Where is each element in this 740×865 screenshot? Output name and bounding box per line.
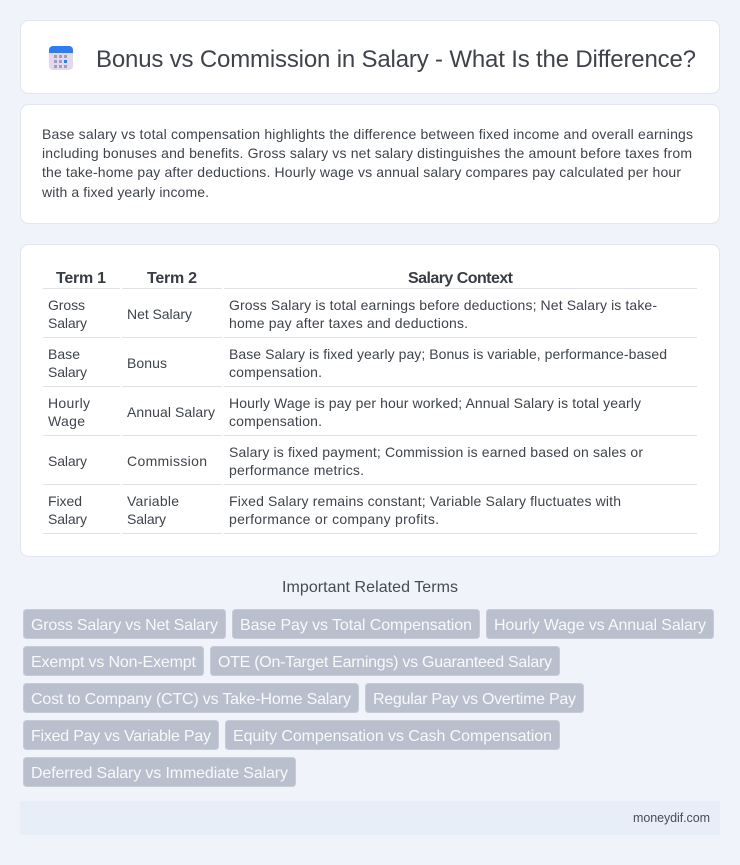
tag: Gross Salary vs Net Salary	[31, 617, 218, 634]
heading: related terms: Important Related Terms	[282, 579, 458, 596]
tag: Base Pay vs Total Compensation	[240, 617, 472, 634]
tag	[226, 720, 560, 750]
table row: base vs bonus: Bonus	[127, 355, 167, 371]
footer	[20, 801, 720, 835]
table row: fixed vs variable: Salary	[127, 511, 166, 527]
title: Bonus vs Commission in Salary - What Is the Difference?	[96, 46, 696, 73]
table row: base vs bonus: compensation.	[229, 364, 322, 380]
text block: summary paragraph: including bonuses and benefits. Gross salary vs net salary distinguishes the amount before taxes from	[42, 145, 692, 161]
panel: header	[20, 20, 720, 94]
tag: Regular Pay vs Overtime Pay	[373, 691, 576, 708]
icon: calendar	[49, 46, 73, 70]
table row: gross vs net: home pay after taxes and deductions.	[229, 315, 468, 331]
table row: hourly vs annual: Annual Salary	[127, 404, 215, 420]
tag	[486, 610, 714, 638]
tag: Hourly Wage vs Annual Salary	[494, 617, 706, 634]
tag	[24, 684, 358, 712]
tag	[232, 610, 480, 638]
tag: Cost to Company (CTC) vs Take-Home Salary	[31, 691, 351, 708]
text block: summary paragraph: with a fixed yearly income.	[41, 184, 209, 200]
table row: fixed vs variable: Fixed	[48, 493, 82, 509]
table row: gross vs net	[48, 297, 657, 331]
table row: hourly vs annual	[48, 395, 641, 429]
panel: comparison table	[20, 244, 720, 556]
table row: fixed vs variable: performance or company profits.	[229, 511, 439, 527]
table row: gross vs net: Gross	[48, 297, 85, 313]
tag: Deferred Salary vs Immediate Salary	[31, 765, 288, 782]
table row: salary vs commission: Salary is fixed payment; Commission is earned based on sales or	[229, 444, 643, 460]
tag: Exempt vs Non-Exempt	[31, 654, 197, 671]
table row: base vs bonus	[48, 346, 667, 380]
table row: hourly vs annual: Hourly	[48, 395, 90, 411]
tag list: related terms	[24, 610, 714, 786]
table row: salary vs commission	[48, 444, 643, 478]
tag	[24, 610, 226, 638]
table header: Term 1	[56, 270, 106, 287]
footer: moneydif.com	[633, 811, 710, 825]
table row: gross vs net: Gross Salary is total earnings before deductions; Net Salary is take-	[229, 297, 657, 313]
tag	[366, 684, 584, 712]
tag	[24, 646, 204, 676]
tag	[24, 758, 296, 786]
text block: summary paragraph: the take-home pay after deductions. Hourly wage vs annual salary compares pay calculated per hour	[42, 164, 681, 180]
panel: summary	[20, 104, 720, 224]
tag	[210, 646, 560, 676]
table row: hourly vs annual: Hourly Wage is pay per hour worked; Annual Salary is total yearly	[229, 395, 641, 411]
tag: OTE (On-Target Earnings) vs Guaranteed Salary	[218, 654, 552, 671]
text block: summary paragraph: Base salary vs total compensation highlights the difference between fixed income and overall earnings	[42, 126, 693, 142]
table row: base vs bonus: Base Salary is fixed yearly pay; Bonus is variable, performance-based	[229, 346, 667, 362]
table row: fixed vs variable: Fixed Salary remains constant; Variable Salary fluctuates with	[229, 493, 621, 509]
table row: fixed vs variable: Variable	[127, 493, 179, 509]
table row: base vs bonus: Base	[48, 346, 80, 362]
text block: summary paragraph	[41, 126, 693, 200]
table row: base vs bonus: Salary	[48, 364, 87, 380]
table row: fixed vs variable: Salary	[48, 511, 87, 527]
table row: salary vs commission: Salary	[48, 453, 87, 469]
tag: Fixed Pay vs Variable Pay	[31, 728, 211, 745]
tag	[24, 720, 218, 750]
table row: hourly vs annual: compensation.	[229, 413, 322, 429]
table row: gross vs net: Salary	[48, 315, 87, 331]
table row: salary vs commission: Commission	[127, 453, 207, 469]
table header: Term 2	[147, 270, 197, 287]
tag: Equity Compensation vs Cash Compensation	[233, 728, 552, 745]
table row: salary vs commission: performance metrics.	[229, 462, 364, 478]
table header: Salary Context	[408, 270, 514, 287]
table row: fixed vs variable	[48, 493, 621, 527]
table row: gross vs net: Net Salary	[127, 306, 192, 322]
table header	[56, 270, 514, 287]
table row: hourly vs annual: Wage	[48, 413, 85, 429]
